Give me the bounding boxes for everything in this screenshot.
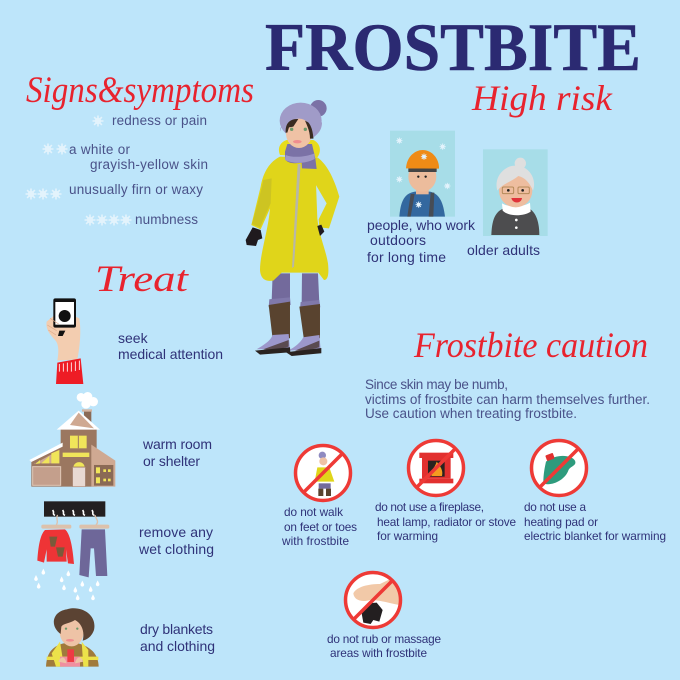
text: remove wet clothing: wet clothing [138,541,214,557]
text: do not rub: areas with frostbite [330,646,427,660]
text: remove wet clothing: remove any [139,524,213,540]
icon: no rubbing [346,572,400,628]
icon: no walking [296,446,350,500]
panel: symptoms list: unusually firn or waxy [69,182,203,197]
illustration: older woman [483,149,548,236]
panel: symptoms list [26,113,208,227]
text: dry blankets: and clothing [140,638,215,654]
text: seek medical attention: seek [118,330,149,346]
title: FROSTBITE [265,9,641,85]
text: warm room: warm room [142,436,212,452]
illustration: woman in yellow coat [246,100,339,356]
text: warm room [142,436,212,469]
icon: person with warm drink [46,608,99,667]
text: caution paragraph: Use caution when treating frostbite. [365,406,577,421]
heading: treat: Treat [95,259,190,300]
text: caution paragraph: victims of frostbite can harm themselves further. [365,392,650,407]
text: do not use fireplace [375,500,516,543]
icon: wet clothing on rack [34,501,109,600]
text: high risk groups: older adults [467,242,540,258]
panel: symptoms list: a white or [69,142,130,157]
text: warm room: or shelter [143,453,200,469]
text: do not use fireplace: for warming [377,529,438,543]
text: seek medical attention [118,330,223,362]
panel: symptoms list: grayish-yellow skin [90,157,208,172]
text: seek medical attention: medical attention [118,346,223,362]
panel: symptoms list: numbness [135,212,198,227]
panel: symptoms list: redness or pain [112,113,207,128]
icon: no heating pad [532,440,586,496]
heading: high risk: High risk [471,78,613,118]
text: do not rub: do not rub or massage [327,632,441,646]
text: caution paragraph [365,377,650,421]
icon: hand holding phone [46,298,83,384]
text: do not walk: with frostbite [281,534,349,548]
text: high risk groups: people, who work [367,217,476,233]
text: dry blankets: dry blankets [140,621,213,637]
text: do not use heating pad [524,500,666,543]
text: dry blankets [140,621,215,654]
heading: signs and symptoms: Signs&symptoms [26,70,254,111]
icon: no fireplace [408,440,464,496]
text: high risk groups: outdoors [370,232,426,248]
text: do not use fireplace: do not use a fireplase, [375,500,484,514]
text: remove wet clothing [138,524,214,557]
illustration: outdoor worker [390,131,455,217]
text: do not walk [281,505,357,548]
text: do not walk: on feet or toes [284,520,357,534]
text: caution paragraph: Since skin may be numb, [365,377,508,392]
text: high risk groups: for long time [367,249,446,265]
text: high risk groups [367,217,540,265]
text: do not use heating pad: electric blanket for warming [524,529,666,543]
text: do not use fireplace: heat lamp, radiator or stove [377,515,516,529]
text: do not walk: do not walk [284,505,343,519]
text: do not use heating pad: heating pad or [524,515,598,529]
text: do not rub [327,632,441,660]
icon: house [29,392,115,487]
text: do not use heating pad: do not use a [524,500,586,514]
heading: frostbite caution: Frostbite caution [413,325,648,365]
